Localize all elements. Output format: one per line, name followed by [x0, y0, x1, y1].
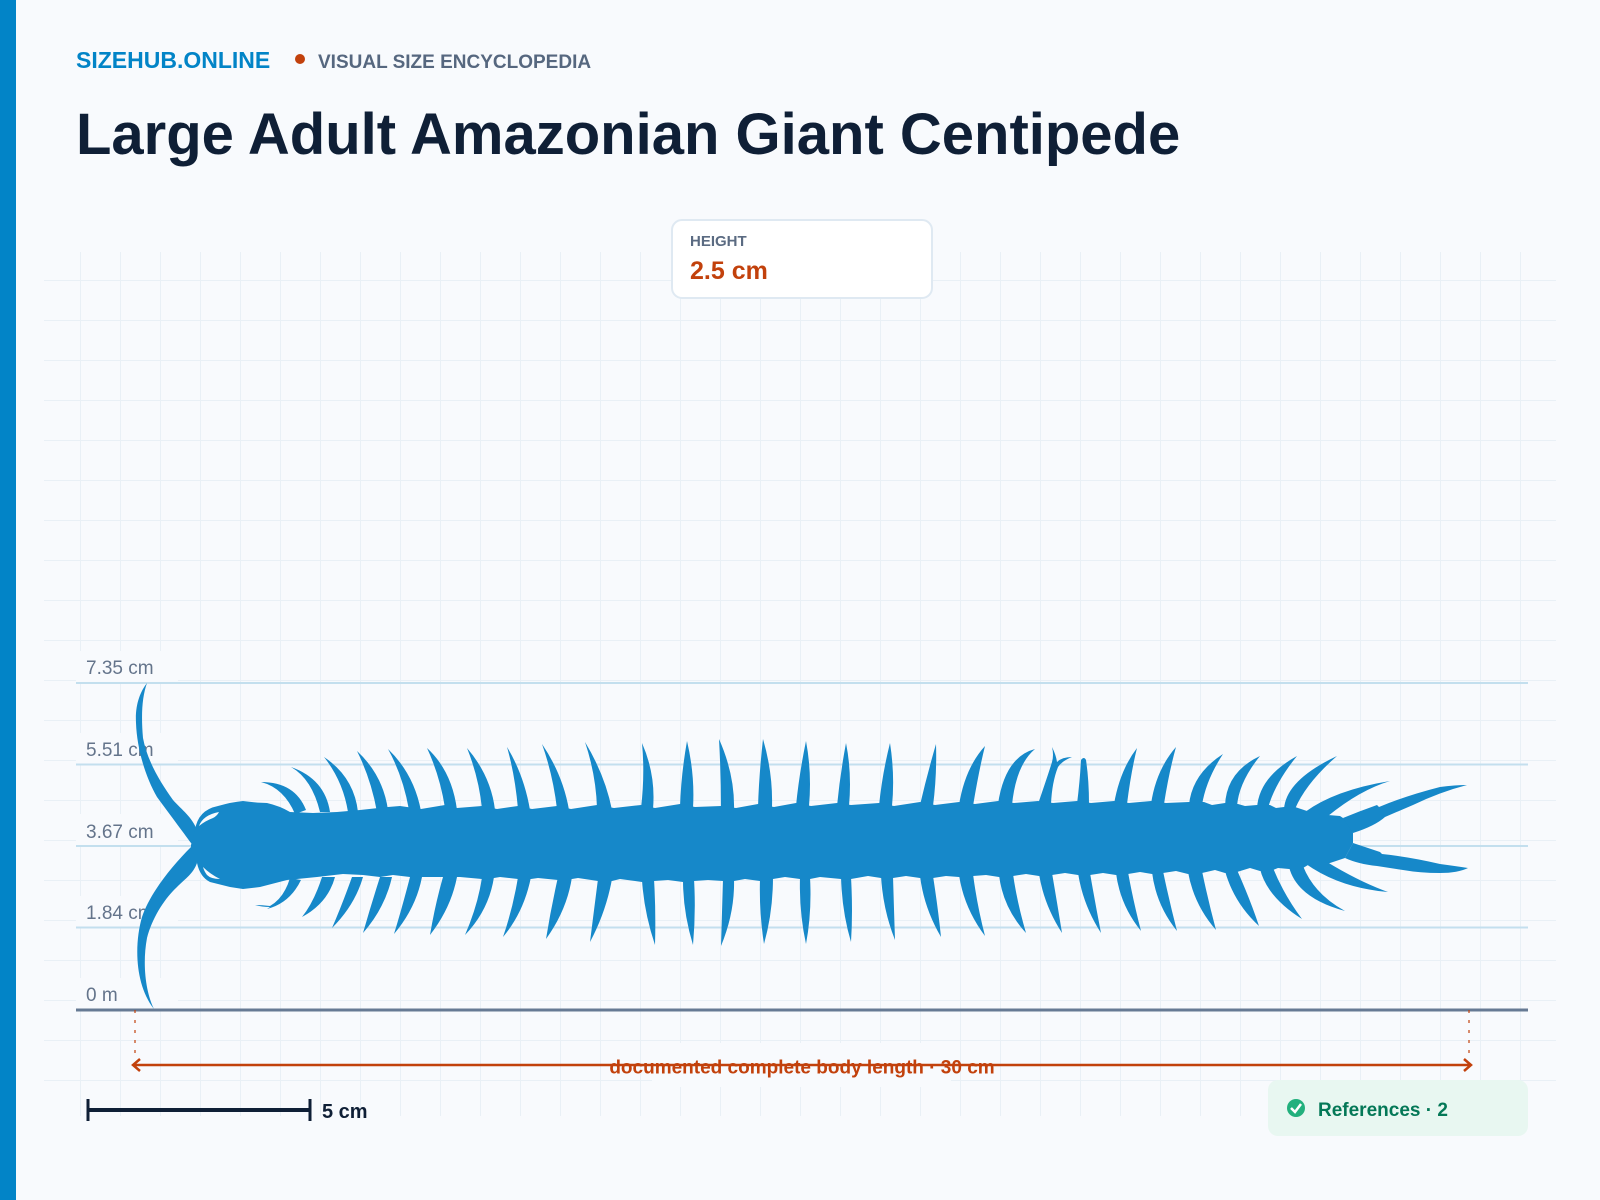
dimension arrow — [133, 1059, 1471, 1071]
baseline — [76, 1008, 1528, 1012]
y axis labels: 3.67 cm — [86, 822, 154, 843]
head highlights — [199, 812, 220, 879]
icon: check circle — [1287, 1099, 1305, 1117]
right dotted guide — [1468, 1010, 1470, 1060]
y axis reference lines — [76, 651, 1528, 1010]
brand name: SIZEHUB.ONLINE — [76, 47, 270, 73]
y axis labels: 5.51 cm — [86, 740, 154, 761]
y axis labels — [86, 658, 154, 1006]
left dotted guide — [134, 1010, 136, 1060]
y axis labels: 1.84 cm — [86, 903, 154, 924]
body length dimension — [133, 1010, 1471, 1087]
header: brand line — [76, 47, 591, 73]
height value: 2.5 cm — [690, 257, 768, 285]
left accent stripe — [0, 0, 16, 1200]
brand dot — [295, 54, 305, 64]
label backing — [652, 1043, 951, 1087]
scale label: 5 cm — [322, 1101, 368, 1123]
height label: HEIGHT — [690, 233, 747, 250]
height card — [672, 220, 932, 298]
body and head — [191, 801, 1353, 889]
y axis labels: 0 m — [86, 985, 118, 1006]
antennae — [136, 683, 197, 846]
scale bar — [88, 1099, 368, 1123]
centipede silhouette — [136, 683, 1468, 1009]
lower legs — [255, 843, 1468, 946]
dimension label: documented complete body length · 30 cm — [609, 1058, 995, 1078]
references text: References · 2 — [1318, 1100, 1448, 1121]
upper legs — [261, 739, 1467, 833]
references badge — [1268, 1080, 1528, 1136]
title: Large Adult Amazonian Giant Centipede — [76, 102, 1180, 167]
y axis labels: 7.35 cm — [86, 658, 154, 679]
tagline: VISUAL SIZE ENCYCLOPEDIA — [318, 52, 591, 73]
